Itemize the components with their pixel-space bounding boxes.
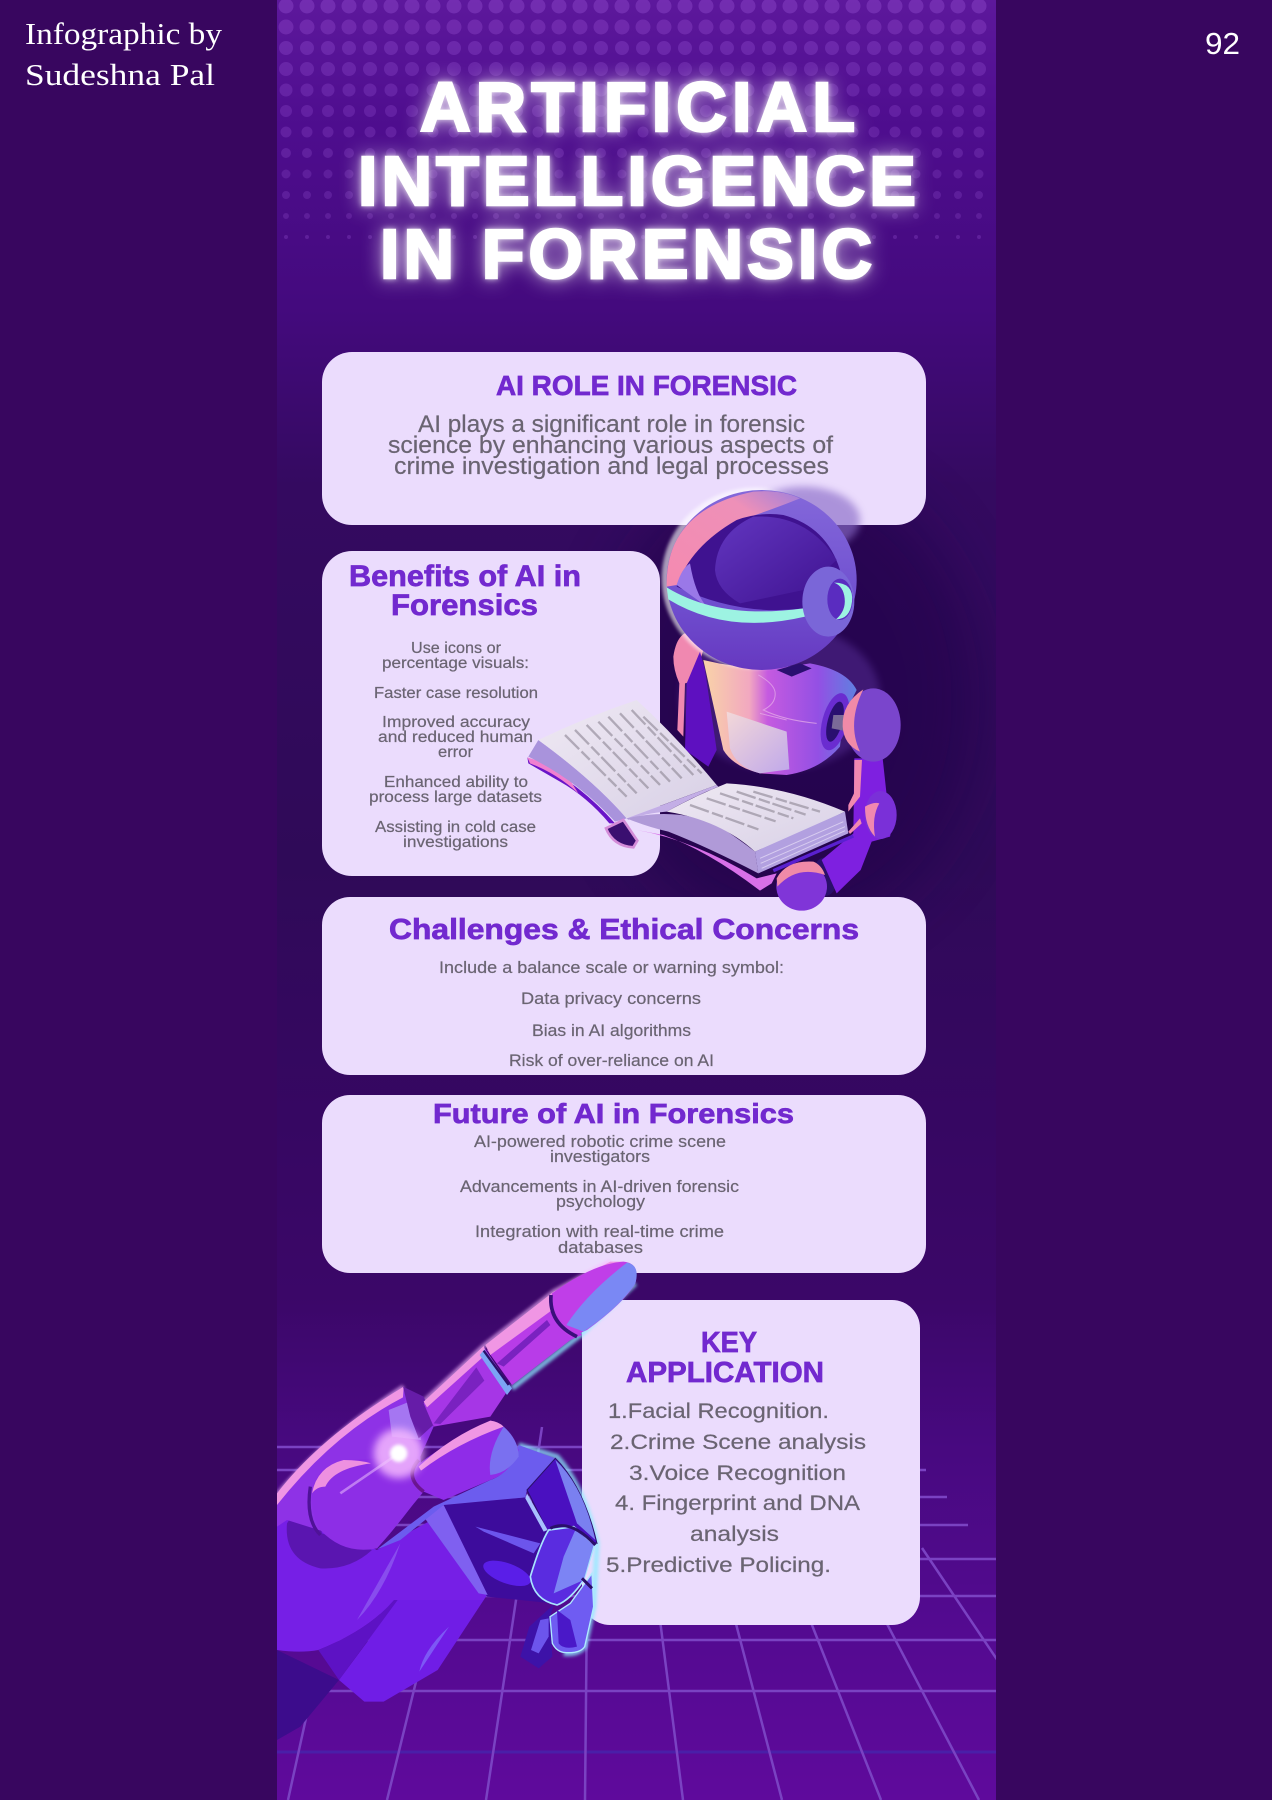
list: future — [460, 1133, 739, 1257]
list: key applications: 3.Voice Recognition — [629, 1462, 846, 1485]
list: future: psychology — [556, 1193, 646, 1211]
panel: benefits — [322, 551, 660, 876]
lower palm — [277, 1520, 484, 1680]
second knuckle — [377, 1421, 555, 1549]
list: future: Integration with real-time crime — [475, 1223, 724, 1241]
text: AI role description: science by enhancing various aspects of — [388, 432, 833, 459]
list: benefits: percentage visuals: — [382, 655, 529, 672]
text: AI role description — [388, 411, 833, 480]
page number: 92 — [1205, 26, 1240, 61]
curled finger — [525, 1458, 597, 1605]
list: key applications: 5.Predictive Policing. — [606, 1554, 831, 1577]
list: benefits: Assisting in cold case — [375, 819, 536, 836]
list: benefits: Enhanced ability to — [384, 774, 528, 791]
heading: key application: KEY — [701, 1327, 757, 1359]
title: ARTIFICIAL — [420, 68, 855, 146]
index finger — [424, 1262, 637, 1427]
title: IN FORENSIC — [380, 215, 872, 293]
heading: key application: APPLICATION — [626, 1357, 824, 1389]
wrist shadow — [277, 1650, 339, 1740]
heading: benefits — [349, 560, 581, 622]
panel: challenges — [322, 897, 926, 1075]
heading: AI role: AI ROLE IN FORENSIC — [496, 370, 797, 401]
list: benefits: and reduced human — [378, 729, 533, 746]
small fingers — [520, 1573, 594, 1668]
title: IN FORENSIC — [380, 215, 872, 293]
list: challenges: Include a balance scale or warning symbol: — [439, 958, 784, 977]
list: challenges: Risk of over-reliance on AI — [509, 1051, 714, 1070]
credit: Infographic by Sudeshna Pal: Sudeshna Pal — [25, 57, 215, 92]
list: future: AI-powered robotic crime scene — [474, 1133, 726, 1151]
cuff — [339, 1590, 490, 1702]
cavity between fingers — [424, 1497, 554, 1603]
heading: future: Future of AI in Forensics — [433, 1098, 794, 1129]
credit: Infographic by Sudeshna Pal: Infographic by — [25, 16, 223, 51]
list: benefits: Improved accuracy — [382, 714, 530, 731]
list: key applications: 4. Fingerprint and DNA — [615, 1492, 860, 1515]
title: INTELLIGENCE — [358, 142, 916, 220]
list: challenges: Data privacy concerns — [521, 989, 701, 1008]
list: benefits: process large datasets — [369, 789, 542, 806]
illustration: robot reading a book — [527, 487, 901, 911]
heading: key application — [626, 1327, 824, 1389]
robot head — [662, 487, 860, 670]
illustration: robotic hand pointing — [277, 1262, 637, 1740]
upper hand with pink edge — [277, 1387, 434, 1548]
spark — [340, 1428, 424, 1493]
list: benefits: investigations — [403, 834, 508, 851]
title: IN FORENSIC — [380, 215, 872, 293]
list: key applications: 2.Crime Scene analysis — [610, 1431, 866, 1454]
list: future: Advancements in AI-driven forensic — [460, 1178, 739, 1196]
panel: future — [322, 1095, 926, 1273]
heading: benefits: Forensics — [391, 589, 538, 622]
text: AI role description: crime investigation and legal processes — [394, 453, 829, 480]
ear piece — [802, 567, 854, 637]
robot rear arm — [673, 632, 717, 767]
list: challenges — [439, 958, 784, 1070]
list: benefits — [369, 640, 542, 851]
robot torso — [703, 660, 857, 775]
list: future: investigators — [550, 1148, 650, 1166]
first knuckle — [307, 1460, 413, 1550]
credit: Infographic by Sudeshna Pal — [25, 16, 223, 92]
title: INTELLIGENCE — [358, 142, 916, 220]
title: INTELLIGENCE — [358, 142, 916, 220]
list: benefits: Faster case resolution — [374, 685, 538, 702]
title: ARTIFICIAL — [420, 68, 855, 146]
robot wheel — [776, 862, 827, 911]
central poster panel — [277, 0, 1000, 1800]
panel: key application — [582, 1300, 920, 1625]
heading: challenges: Challenges & Ethical Concerns — [389, 914, 859, 946]
cyan visor band — [667, 587, 805, 623]
list: key applications — [606, 1400, 866, 1577]
heading: benefits: Benefits of AI in — [349, 560, 581, 593]
list: key applications: analysis — [690, 1523, 779, 1546]
list: benefits: error — [438, 744, 473, 761]
panel: AI role in forensic — [322, 352, 926, 525]
text: AI role description: AI plays a significant role in forensic — [418, 411, 805, 438]
title: ARTIFICIAL — [420, 68, 855, 146]
open book — [527, 700, 853, 891]
list: challenges: Bias in AI algorithms — [532, 1021, 691, 1040]
robot forearm and shoulder — [812, 688, 901, 896]
list: benefits: Use icons or — [411, 640, 501, 657]
list: future: databases — [558, 1239, 643, 1257]
list: key applications: 1.Facial Recognition. — [608, 1400, 829, 1423]
title — [358, 68, 916, 293]
